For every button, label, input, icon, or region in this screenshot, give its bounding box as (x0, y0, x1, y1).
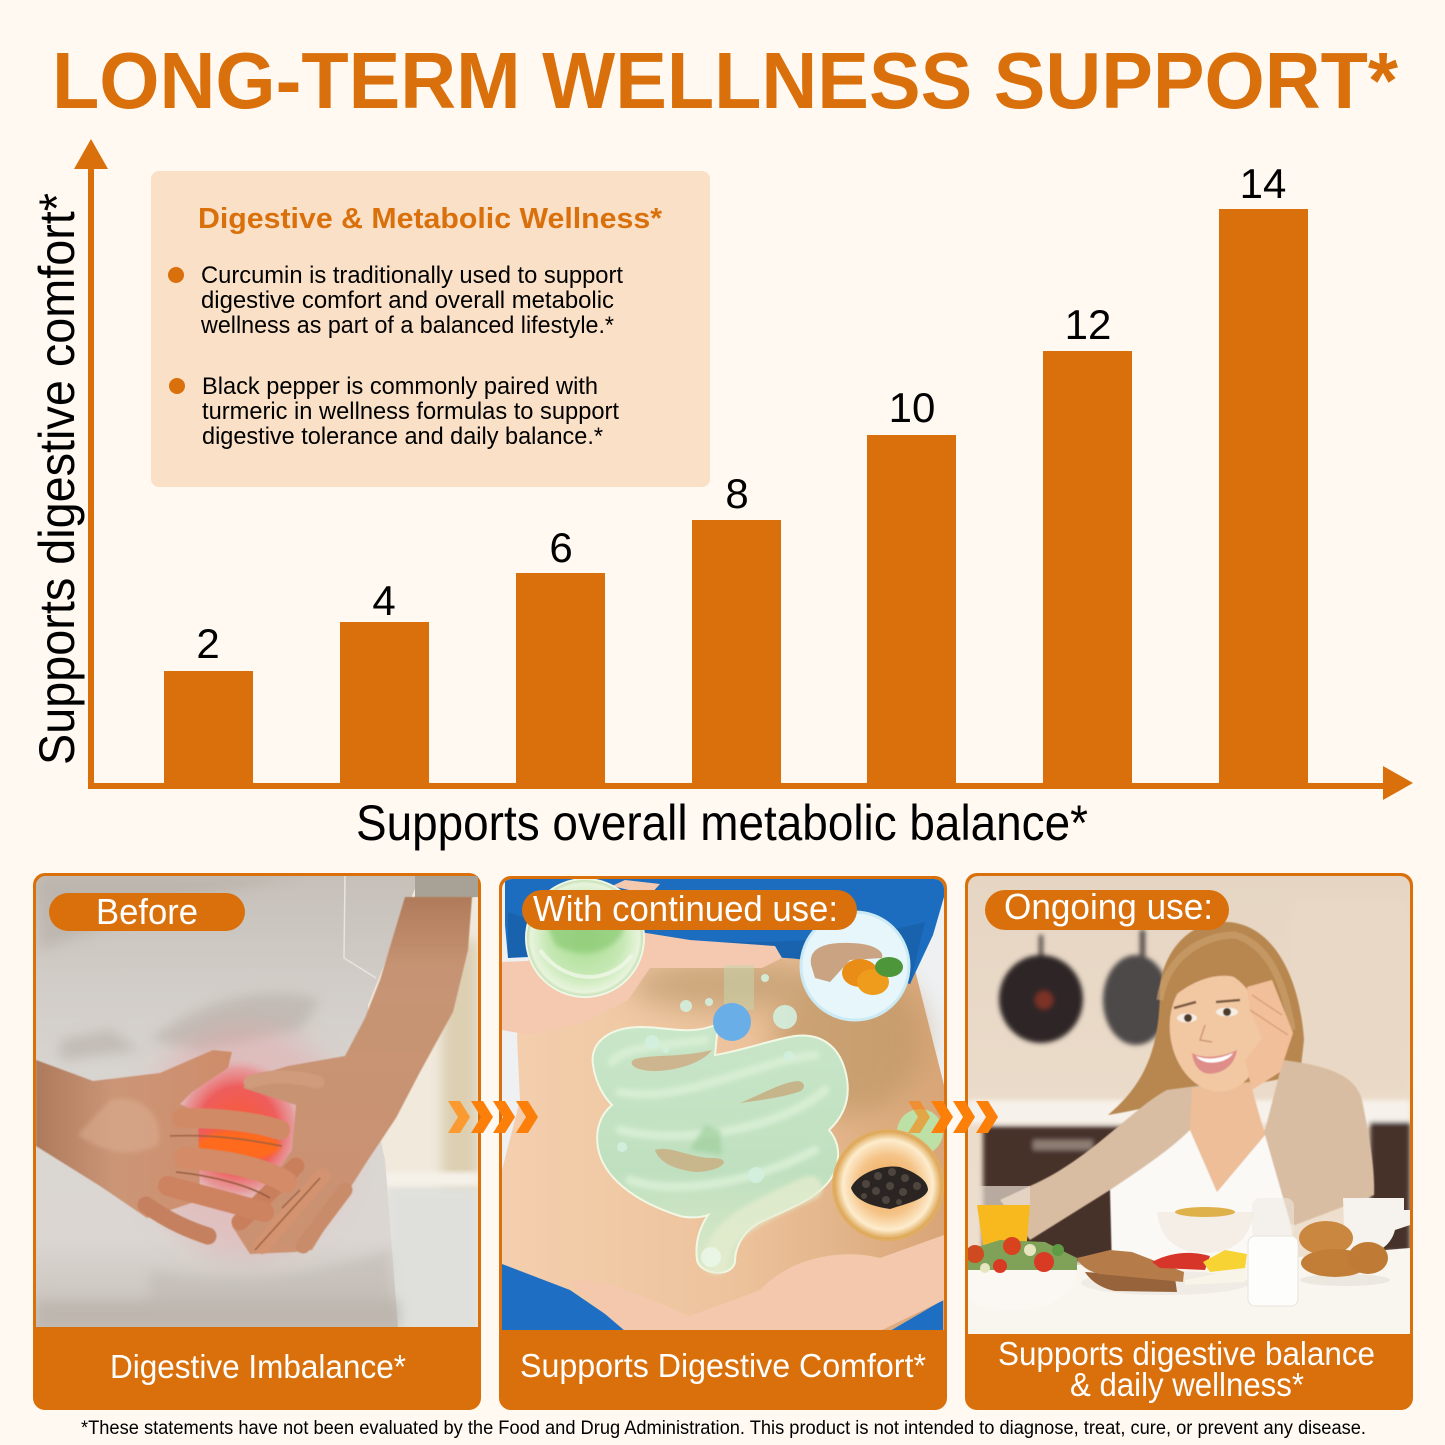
panel: before (33, 873, 481, 1410)
caption: & daily wellness* (1070, 1366, 1304, 1403)
blue ball (713, 1003, 751, 1041)
bullet: black pepper: turmeric in wellness formulas to support (202, 398, 619, 425)
before label pill: Before (96, 891, 198, 932)
woman (1000, 922, 1374, 1270)
bullet: black pepper: Black pepper is commonly paired with (202, 373, 598, 400)
ongoing use label pill: Ongoing use: (1004, 886, 1213, 927)
caption: Supports digestive balance (998, 1335, 1375, 1372)
bullet: black pepper: digestive tolerance and daily balance.* (202, 423, 603, 450)
bar value labels (196, 160, 1286, 667)
x axis arrow (88, 766, 1413, 800)
table (968, 1248, 1410, 1334)
panel: ongoing use (965, 873, 1413, 1410)
turmeric bubble (801, 912, 909, 1020)
bubbles (617, 974, 797, 1267)
bullet: curcumin: wellness as part of a balanced lifestyle.* (200, 312, 614, 339)
orange juice glass (977, 1186, 1030, 1252)
panel: digestive and metabolic wellness (151, 171, 710, 487)
cereal bowl (1157, 1207, 1254, 1253)
bar chart (29, 139, 1413, 851)
bar value labels: 14 (1240, 160, 1286, 207)
intestine (593, 1024, 848, 1273)
hand on temple (1245, 980, 1293, 1090)
bars (164, 209, 1308, 783)
coffee cup (1343, 1198, 1410, 1256)
salad bowl (968, 1237, 1077, 1273)
black pepper bubble (833, 1130, 943, 1240)
lower hand (604, 1235, 944, 1330)
y axis arrow (74, 139, 108, 789)
bar value labels: 8 (725, 470, 749, 517)
upper hand (502, 932, 782, 1035)
caption: Supports Digestive Comfort* (520, 1347, 926, 1384)
bar value labels: 12 (1065, 301, 1111, 348)
bullet: black pepper (169, 373, 619, 450)
arrow: before to continued use (448, 1101, 538, 1133)
panel: with continued use (499, 876, 947, 1410)
bullet: curcumin (168, 262, 623, 339)
right arm and hand (232, 897, 472, 1254)
breakfast plate (1077, 1250, 1249, 1295)
photo: smiling woman at breakfast (966, 876, 1410, 1334)
before label pill (49, 891, 245, 932)
caption (998, 1335, 1375, 1403)
eyes and brows (1174, 1000, 1240, 1008)
arrow: continued use to ongoing use (908, 1101, 998, 1133)
illustration: glowing intestine on torso (502, 879, 944, 1331)
small sphere behind pepper (897, 1109, 943, 1155)
caption: Digestive Imbalance* (110, 1348, 406, 1385)
panel heading: Digestive & Metabolic Wellness* (198, 203, 663, 235)
bar value labels: 6 (549, 524, 573, 571)
kitchen counter and cabinets (968, 1100, 1410, 1261)
footer disclaimer: *These statements have not been evaluated by the Food and Drug Administration. This product is not intended to diagnose, treat, cure, or prevent any disease. (81, 1418, 1366, 1439)
bullet: curcumin: Curcumin is traditionally used to support (201, 262, 623, 289)
bar value labels: 10 (889, 384, 935, 431)
x axis label: Supports overall metabolic balance* (356, 795, 1088, 851)
left arm and hand (36, 1050, 286, 1236)
bar value labels: 2 (196, 620, 220, 667)
continued use label pill: With continued use: (533, 888, 838, 929)
y axis label: Supports digestive comfort* (29, 193, 85, 765)
title: LONG-TERM WELLNESS SUPPORT* (52, 36, 1399, 125)
photo: hands on inflamed stomach (36, 876, 480, 1335)
green sphere (526, 879, 644, 997)
milk bottle (1248, 1198, 1298, 1306)
hanging pans (999, 930, 1169, 1045)
bar value labels: 4 (372, 577, 396, 624)
bullet: curcumin: digestive comfort and overall metabolic (201, 287, 614, 314)
croissants (1299, 1221, 1390, 1286)
